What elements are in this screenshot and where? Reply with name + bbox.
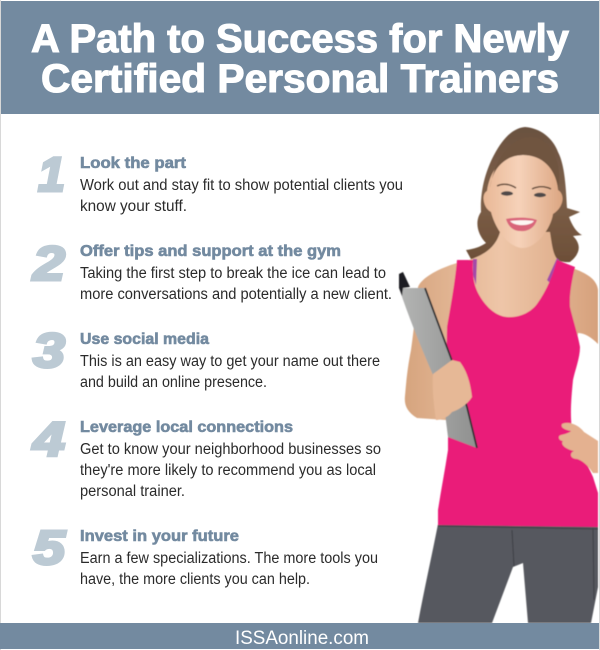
text: step 1 description: [80, 177, 403, 215]
step 3: [33, 325, 380, 391]
title: A Path to Success for Newly: [31, 17, 570, 61]
number 3: 3: [33, 325, 65, 378]
heading: use social media: Use social media: [80, 331, 209, 348]
footer bar: [0, 623, 599, 649]
face: [484, 155, 563, 248]
pen: [399, 272, 410, 296]
footer website: ISSAonline.com: [235, 628, 369, 649]
heading: invest in your future: Invest in your future: [80, 528, 239, 545]
step 5: [33, 522, 378, 588]
title: [31, 17, 570, 101]
number 1: 1: [38, 149, 65, 202]
text: step 4 description: [80, 441, 381, 500]
hairline: [490, 137, 559, 188]
tank top: [438, 260, 598, 527]
clipboard: [399, 288, 477, 448]
smile: [506, 218, 537, 231]
text: step 2 description: more conversations and potentially a new client.: [80, 286, 392, 303]
text: step 4 description: Get to know your neighborhood businesses so: [80, 441, 381, 458]
eyes and brows: [497, 184, 551, 197]
hand holding clipboard: [433, 360, 472, 420]
text: step 4 description: personal trainer.: [80, 483, 185, 500]
title: Certified Personal Trainers: [41, 57, 559, 101]
hand on hip: [559, 423, 598, 473]
text: step 2 description: [80, 265, 392, 303]
header banner: [1, 1, 599, 114]
heading: offer tips: Offer tips and support at the gym: [80, 243, 341, 260]
heading: look the part: Look the part: [80, 155, 186, 172]
text: step 4 description: they're more likely to recommend you as local: [80, 462, 376, 479]
text: step 1 description: Work out and stay fit to show potential clients you: [80, 177, 403, 194]
number 4: 4: [32, 414, 65, 467]
text: step 3 description: and build an online presence.: [80, 374, 267, 391]
text: step 2 description: Taking the first step to break the ice can lead to: [80, 265, 386, 282]
illustration: personal trainer: [399, 127, 598, 623]
sports bra strap: [473, 258, 561, 285]
step 2: [32, 238, 392, 303]
text: step 5 description: [80, 550, 378, 588]
pants: [418, 524, 598, 623]
number 5: 5: [33, 522, 67, 575]
text: step 3 description: This is an easy way to get your name out there: [80, 353, 380, 370]
step 1: [38, 149, 403, 215]
text: step 3 description: [80, 353, 380, 391]
heading: leverage local connections: Leverage local connections: [80, 419, 293, 436]
number 2: 2: [32, 238, 65, 291]
step 4: [32, 414, 381, 500]
torso and arm skin: [405, 232, 598, 420]
text: step 5 description: Earn a few specializations. The more tools you: [80, 550, 378, 567]
text: step 1 description: know your stuff.: [80, 198, 187, 215]
hair: [466, 127, 582, 262]
text: step 5 description: have, the more clients you can help.: [80, 571, 310, 588]
